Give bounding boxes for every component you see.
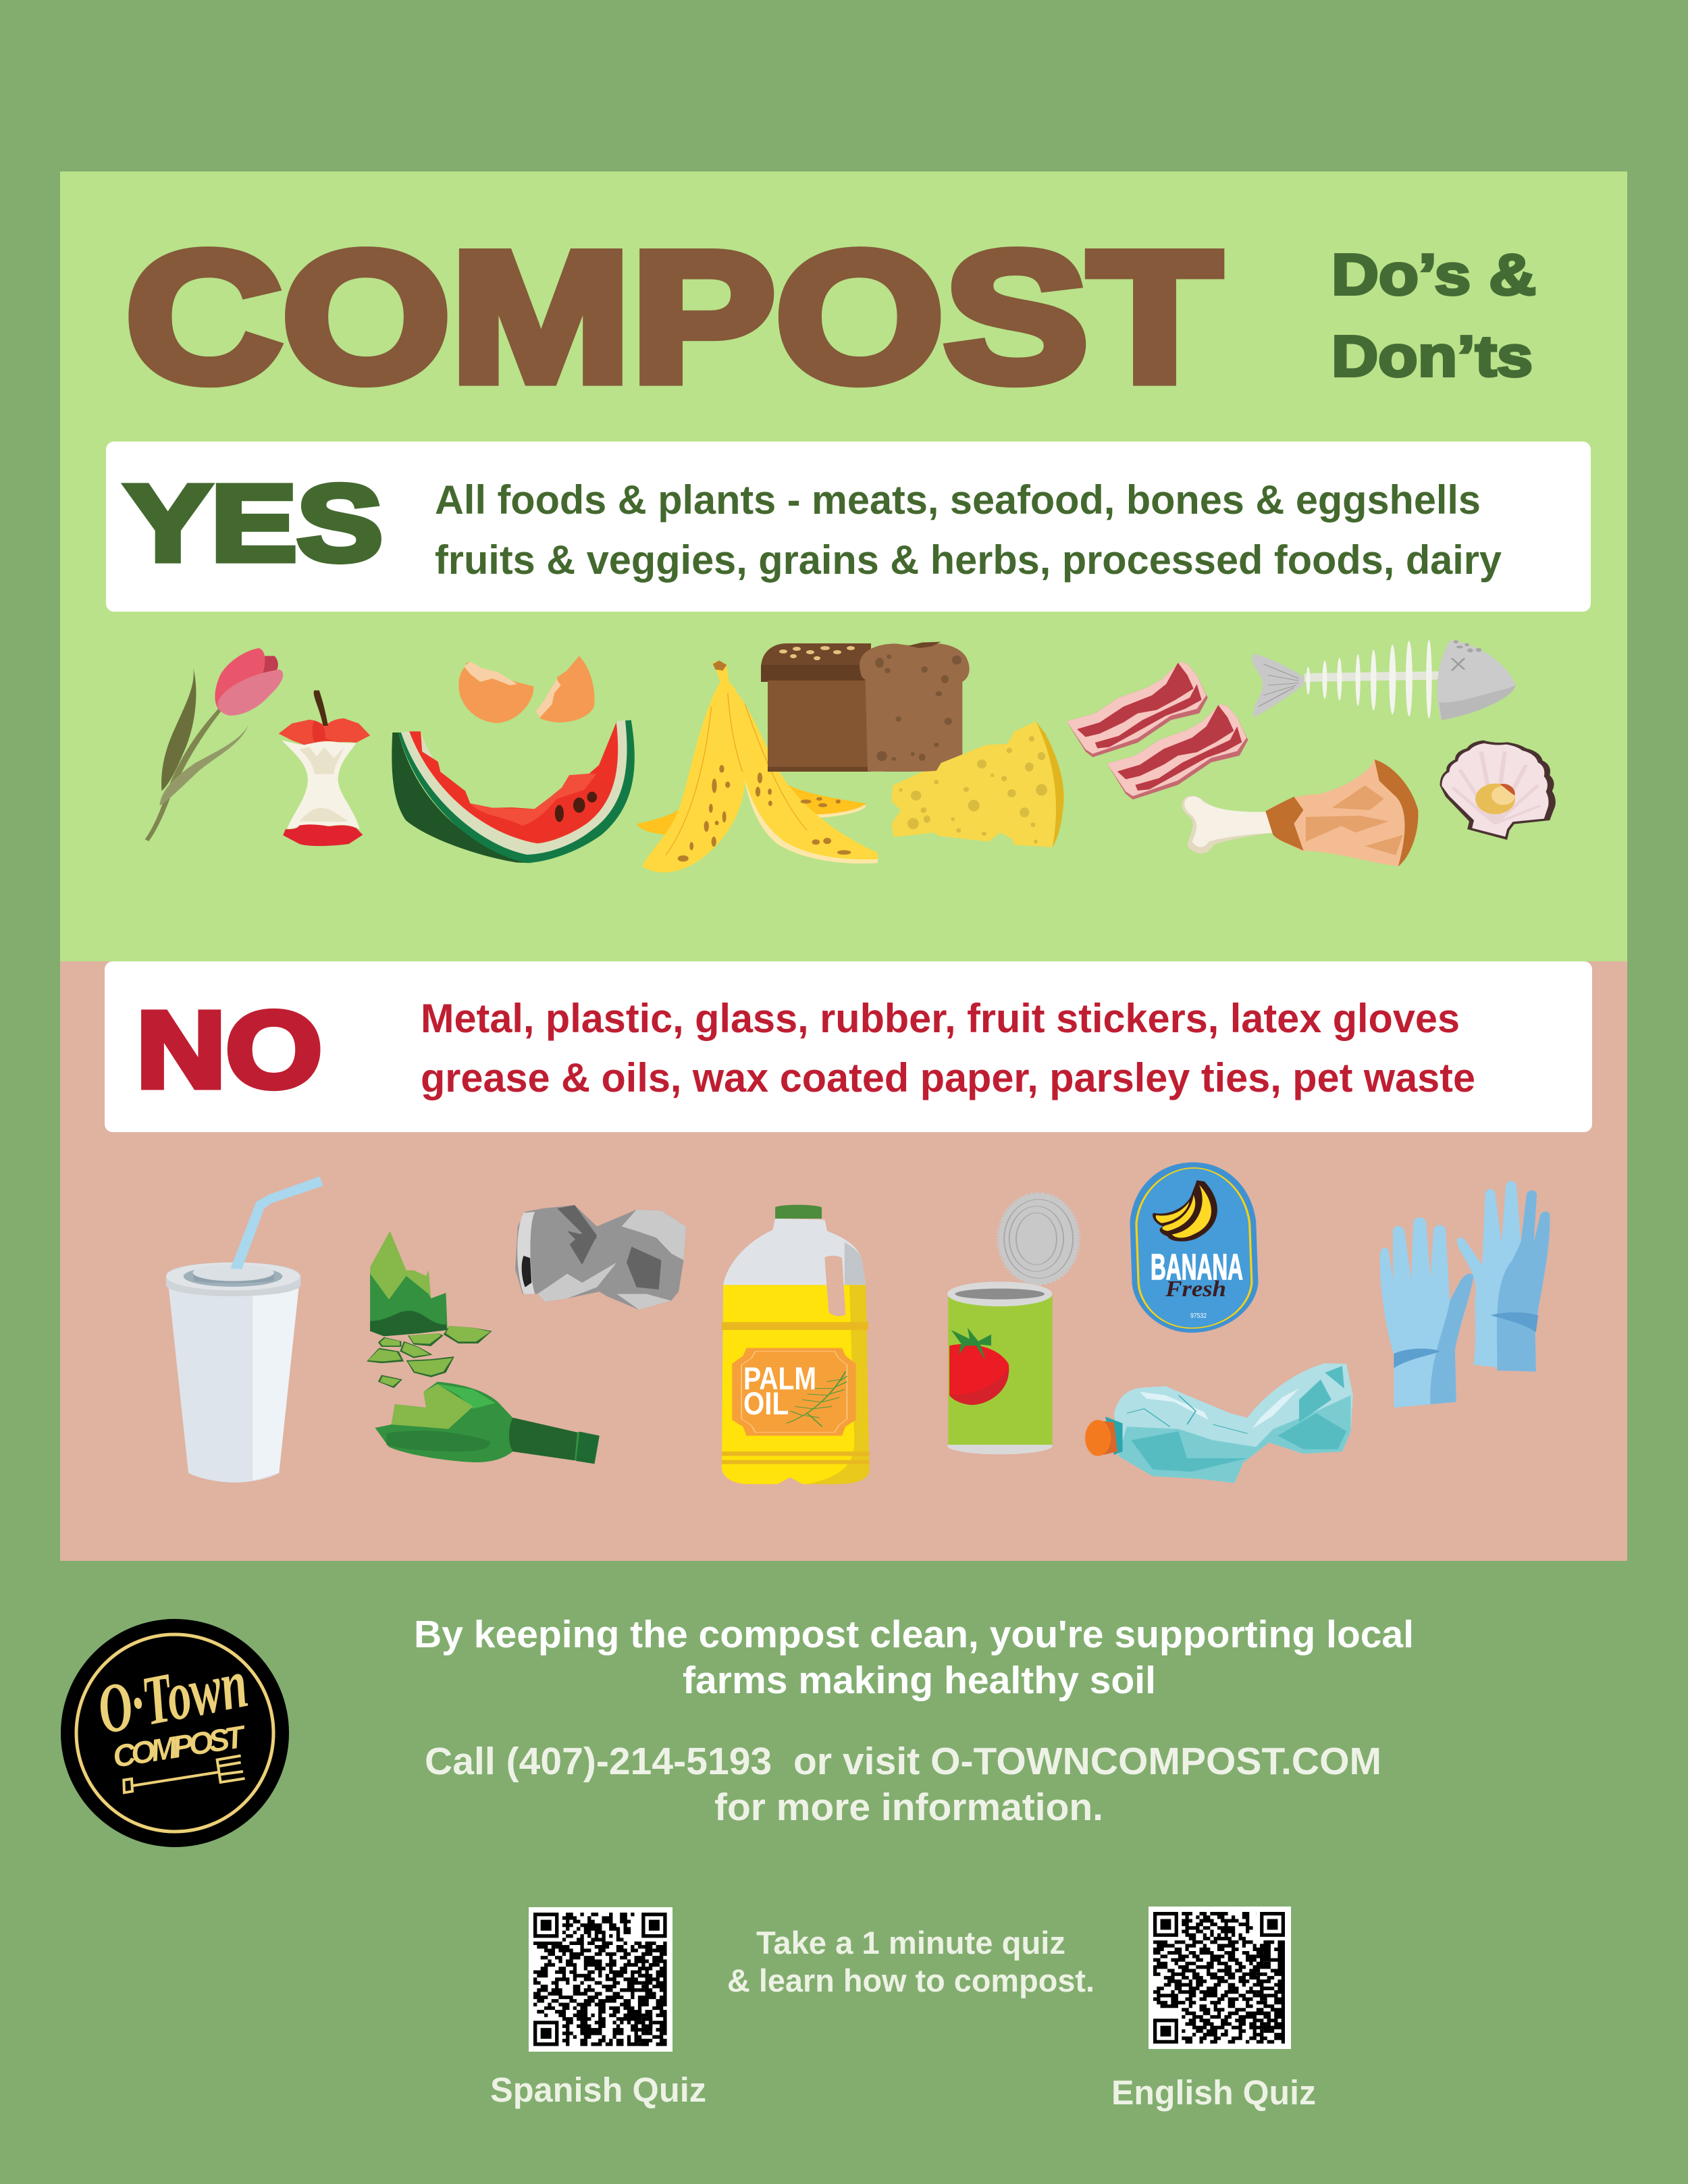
- icon: eggshells: [458, 656, 594, 723]
- icon: palm oil jug: [722, 1205, 869, 1484]
- yes callout: fruits & veggies, grains & herbs, processed foods, dairy: [435, 537, 1502, 583]
- icon: bread loaf: [761, 642, 970, 772]
- quiz prompt: [727, 1925, 1094, 1998]
- quiz prompt: Take a 1 minute quiz: [756, 1925, 1065, 1961]
- no callout: NO: [136, 989, 322, 1110]
- panel: yes section: [60, 171, 1627, 961]
- label: banana sticker text: BANANA: [1151, 1247, 1243, 1287]
- icon: chicken bone: [1182, 760, 1418, 866]
- icon: watermelon rind: [392, 720, 635, 863]
- icon: latex gloves: [1380, 1181, 1550, 1408]
- footer message: for more information.: [714, 1786, 1103, 1829]
- icon: broken green bottle: [367, 1231, 600, 1464]
- icon: apple core: [279, 691, 370, 846]
- title: COMPOST: [126, 214, 1221, 421]
- yes callout: [106, 442, 1591, 612]
- no callout: grease & oils, wax coated paper, parsley ties, pet waste: [421, 1055, 1475, 1100]
- qr code: spanish quiz: [529, 1907, 672, 2052]
- label: banana sticker text: [1151, 1247, 1243, 1320]
- footer message: [414, 1613, 1414, 1829]
- label: palm oil: PALM: [743, 1360, 816, 1396]
- icon: crushed plastic bottle: [1085, 1363, 1353, 1483]
- footer message: farms making healthy soil: [683, 1659, 1156, 1702]
- label: banana sticker text: 97532: [1190, 1312, 1207, 1320]
- yes illustrations left: [145, 648, 878, 872]
- label: banana sticker text: Fresh: [1165, 1277, 1226, 1302]
- subtitle: [1331, 243, 1536, 389]
- yes callout: YES: [125, 462, 383, 583]
- icon: scallop shell: [1440, 741, 1556, 840]
- no illustrations right: [947, 1163, 1258, 1454]
- logo: O-Town Compost: O·Town: [91, 1644, 253, 1749]
- qr code: english quiz: [1149, 1907, 1291, 2049]
- icon: tulip: [145, 648, 283, 841]
- icon: banana peel: [637, 660, 878, 872]
- icon group: bottle and gloves: [1085, 1181, 1550, 1483]
- yes illustrations right: [891, 640, 1556, 866]
- no illustrations left: [166, 1177, 869, 1484]
- subtitle: Don’ts: [1331, 325, 1533, 389]
- no callout: [105, 961, 1592, 1132]
- footer message: By keeping the compost clean, you're supporting local: [414, 1613, 1414, 1656]
- label: spanish quiz: Spanish Quiz: [490, 2071, 706, 2109]
- footer message: Call (407)-214-5193 or visit O-TOWNCOMPOST.COM: [425, 1740, 1381, 1783]
- label: palm oil: OIL: [743, 1385, 789, 1421]
- panel: no section: [60, 961, 1627, 1561]
- icon: bacon strips: [1067, 662, 1248, 799]
- quiz prompt: & learn how to compost.: [727, 1963, 1094, 1998]
- no callout: Metal, plastic, glass, rubber, fruit stickers, latex gloves: [421, 996, 1460, 1041]
- icon: cheese wedge: [891, 721, 1064, 847]
- yes callout: All foods & plants - meats, seafood, bones & eggshells: [435, 477, 1481, 523]
- icon: plastic cup: [166, 1177, 323, 1483]
- subtitle: Do’s &: [1331, 243, 1536, 307]
- logo: O-Town Compost: [61, 1619, 289, 1847]
- icon: crushed aluminum can: [515, 1205, 686, 1310]
- icon: tin can: [947, 1193, 1078, 1454]
- icon: fish skeleton: [1252, 640, 1516, 720]
- icon: banana fruit sticker: [1130, 1163, 1258, 1333]
- label: english quiz: English Quiz: [1111, 2073, 1316, 2112]
- label: palm oil: [743, 1360, 816, 1421]
- logo: O-Town Compost: COMPOST: [110, 1718, 249, 1774]
